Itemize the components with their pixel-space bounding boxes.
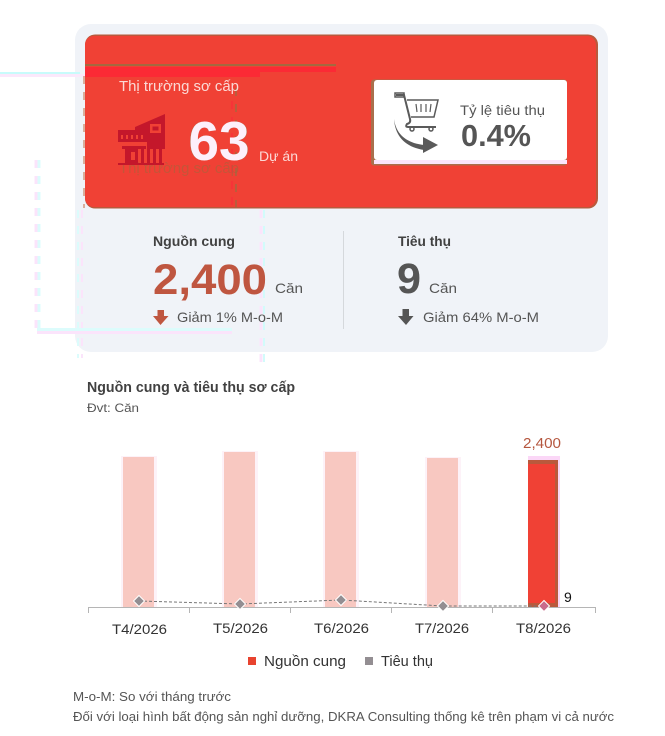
axis labels: T8/2026: [516, 620, 571, 636]
label: consumption rate: Tỷ lệ tiêu thụ: [460, 102, 545, 118]
consumption line: [139, 600, 544, 606]
panel: consumption rate box: [371, 80, 567, 166]
block: supply: [153, 233, 303, 325]
heading: chart title: Nguồn cung và tiêu thụ sơ cấp: [87, 380, 295, 396]
stat: 63 projects: [188, 110, 298, 172]
legend: [248, 654, 433, 670]
axis labels: T6/2026: [314, 620, 369, 636]
block: consumption: Căn: [429, 280, 457, 296]
panel: summary background: [75, 24, 608, 352]
stat: 63 projects: 63: [188, 110, 250, 172]
block: consumption: [397, 233, 539, 325]
axis labels: T4/2026: [112, 621, 167, 637]
data label: 2,400: 2,400: [523, 436, 561, 452]
block: consumption: Tiêu thụ: [398, 233, 451, 249]
axis labels: T5/2026: [213, 620, 268, 636]
legend: Nguồn cung: [264, 654, 346, 670]
axis labels: T7/2026: [415, 620, 469, 636]
heading: primary market: Thị trường sơ cấp: [119, 79, 239, 95]
axis labels: [112, 620, 571, 637]
compression artifact lines: [0, 64, 336, 370]
data label: 9: 9: [564, 589, 572, 605]
axis: [88, 607, 596, 613]
bar chart: [88, 436, 596, 613]
panel: red primary market card: [85, 34, 598, 208]
divider: [343, 231, 344, 329]
block: consumption: 9: [397, 255, 421, 303]
legend: Tiêu thụ: [381, 654, 433, 670]
footnote: Đối với loại hình bất động sản nghỉ dưỡng, DKRA Consulting thống kê trên phạm vi cả nước: [73, 710, 614, 724]
icon: shopping cart with arrow: [394, 93, 438, 153]
value: consumption rate: 0.4%: [461, 118, 531, 153]
block: consumption: Giảm 64% M-o-M: [423, 309, 539, 325]
block: supply: Giảm 1% M-o-M: [177, 309, 283, 325]
stat: 63 projects: 63: [188, 110, 250, 172]
stat: 63 projects: Dự án: [259, 149, 298, 164]
consumption markers: [134, 594, 550, 612]
block: supply: Nguồn cung: [153, 233, 235, 249]
text: unit: Đvt: Căn: [87, 401, 139, 415]
block: supply: 2,400: [153, 256, 267, 304]
footnote: [73, 690, 614, 724]
ghost text artifact: Thị trường sơ cấp: [119, 161, 239, 177]
footnote: M-o-M: So với tháng trước: [73, 690, 231, 704]
block: supply: Căn: [275, 280, 303, 296]
icon: building: [118, 114, 165, 165]
